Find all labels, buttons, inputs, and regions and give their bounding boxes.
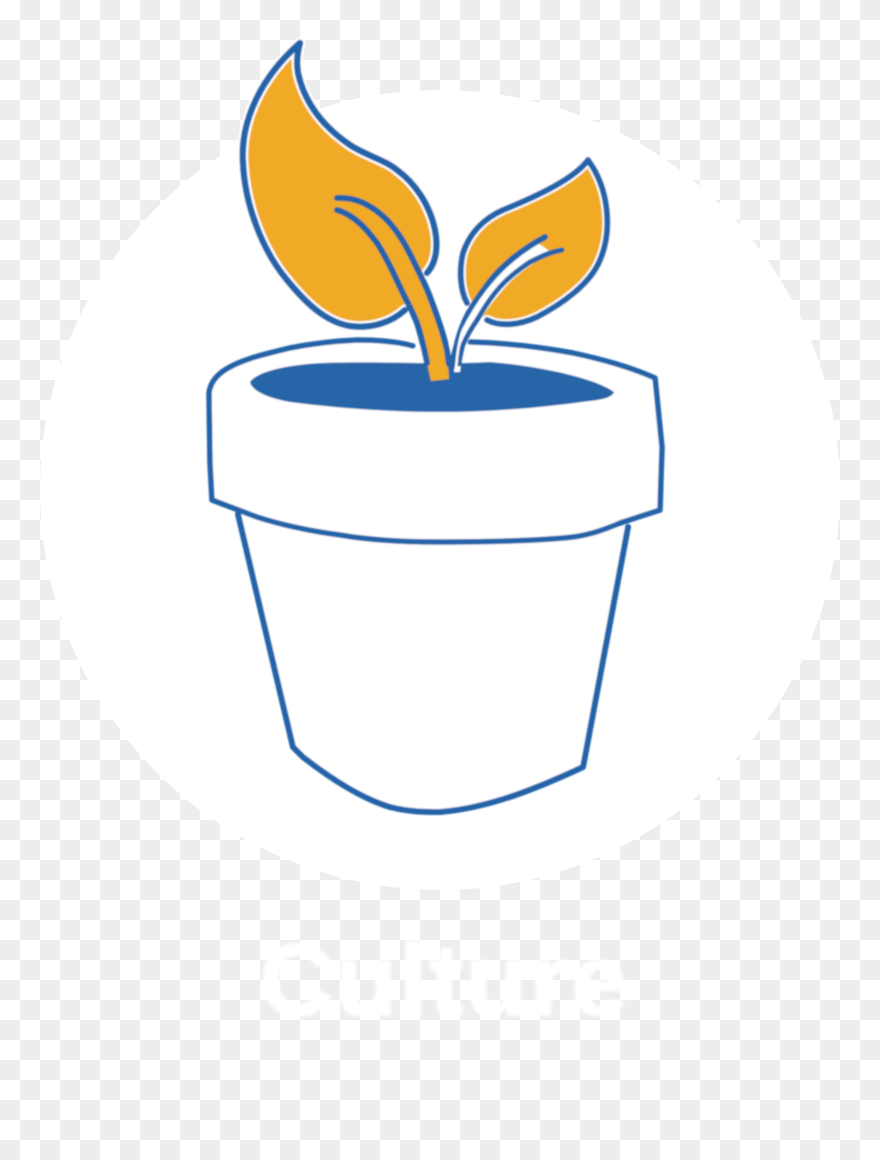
label: Culture: Culture <box>260 923 628 1037</box>
small stem <box>452 237 562 372</box>
big leaf <box>243 43 436 327</box>
big stem <box>337 198 449 381</box>
white circle backdrop <box>40 90 840 890</box>
small leaf <box>461 160 607 324</box>
icon: potted plant <box>209 43 662 812</box>
white gap between stem lines <box>456 248 540 370</box>
pot body <box>238 514 628 812</box>
soil <box>250 362 614 412</box>
pot rim <box>209 340 662 542</box>
